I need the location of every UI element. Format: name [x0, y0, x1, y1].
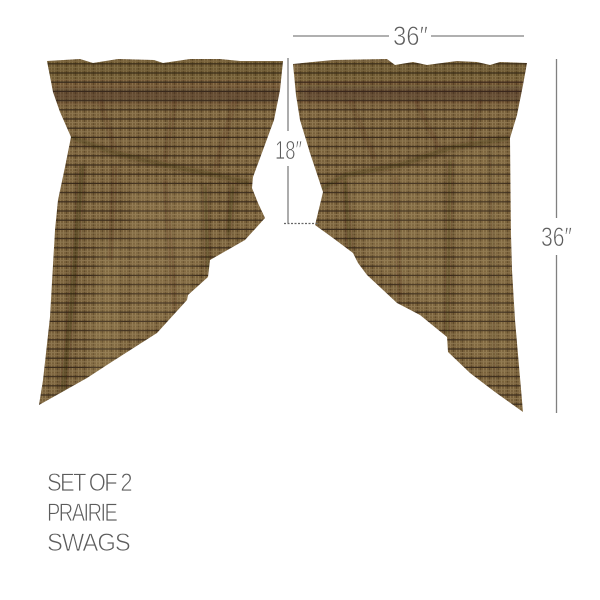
- dimension: top width 36 inches: 36″: [393, 21, 428, 51]
- product caption: SET OF 2: [47, 469, 132, 496]
- product caption: SWAGS: [47, 529, 130, 557]
- dimension: length 36 inches: 36″: [541, 222, 572, 252]
- panel: left curtain panel: [30, 50, 290, 410]
- dimension: drop 18 inches: 18″: [275, 135, 302, 165]
- panel: right curtain panel: [293, 59, 527, 412]
- product caption: [47, 469, 132, 557]
- product caption: PRAIRIE: [47, 499, 118, 527]
